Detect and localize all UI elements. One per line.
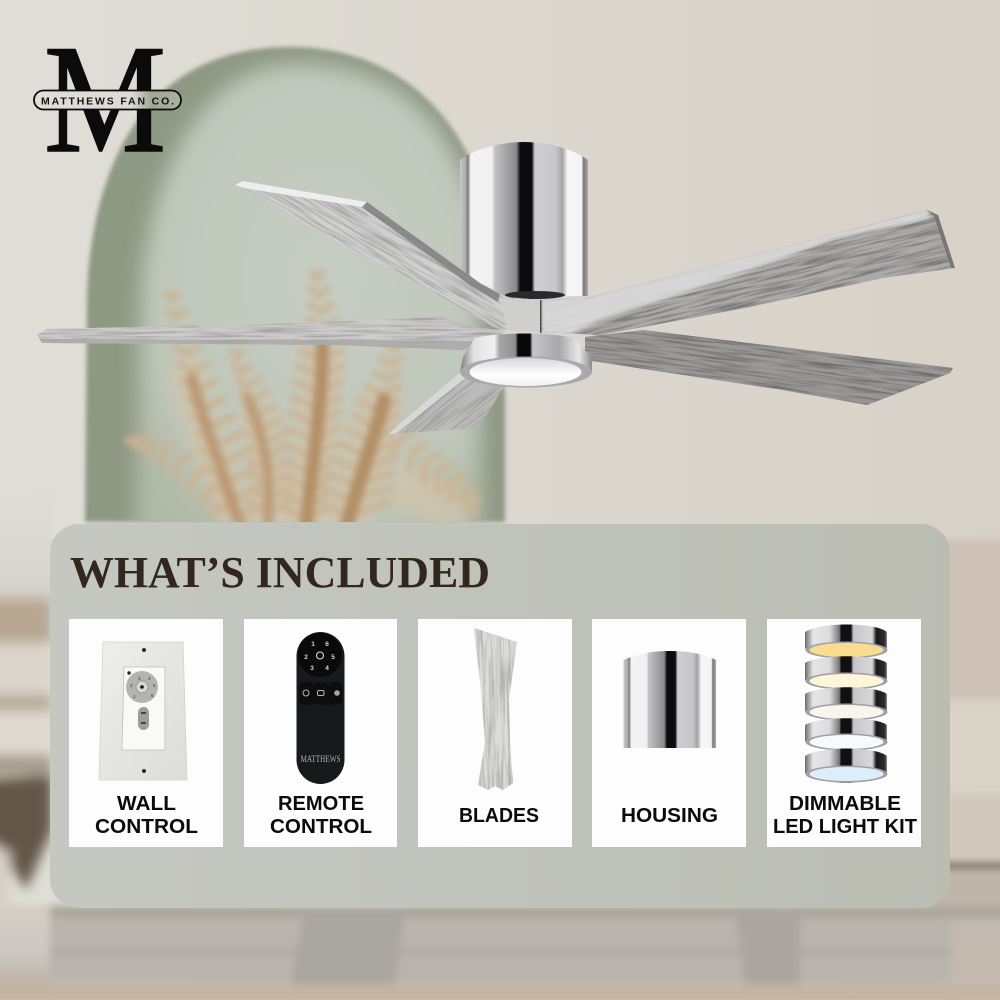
icon: wall control: 4 [148, 676, 151, 681]
icon: wall control: 3 [138, 676, 141, 681]
logo name pill [34, 90, 181, 110]
long left blade [37, 317, 506, 350]
icon: wall control: 2 [130, 683, 133, 688]
panel background [50, 524, 950, 908]
card: blades [418, 614, 572, 847]
card: remote control [244, 619, 397, 847]
icon: remote: 3 [310, 665, 314, 672]
blurred floor and table [0, 905, 1000, 1000]
icon: remote: 6 [325, 641, 329, 648]
motor housing [460, 142, 588, 299]
label: DIMMABLE [789, 792, 901, 815]
icon: remote: MATTHEWS [300, 754, 340, 764]
card: wall control: CONTROL [95, 815, 198, 838]
label: BLADES [459, 804, 539, 827]
icon: LED ring soft white [805, 687, 888, 720]
logo: Matthews Fan Co. [34, 13, 181, 185]
light kit ring [460, 334, 592, 388]
label: WALL [117, 792, 176, 815]
blurred sofa and cushion at left [0, 440, 52, 910]
card: wall control [69, 619, 223, 847]
ceiling fan [37, 142, 955, 434]
card: dimmable LED light kit [767, 619, 921, 847]
LED light [470, 358, 582, 386]
icon: wall control: 6 [151, 693, 154, 698]
icon: wall control: 1 [133, 694, 136, 699]
blade bracket seam [540, 300, 542, 333]
label: HOUSING [621, 804, 718, 827]
icon: LED ring warm cream [805, 656, 888, 690]
icon: remote: 2 [304, 654, 308, 661]
logo name text: MATTHEWS FAN CO. [41, 96, 174, 108]
pampas grass [128, 273, 478, 530]
icon: LED ring cool white [805, 718, 888, 750]
icon: LED ring daylight blue [805, 748, 888, 783]
upper right blade [542, 210, 955, 335]
icon: remote: 5 [331, 654, 335, 661]
icon: housing [624, 651, 716, 748]
icon: remote: 1 [311, 641, 315, 648]
label: REMOTE [278, 792, 364, 815]
arch shape [85, 47, 505, 522]
icon: LED ring warm amber [805, 624, 888, 658]
heading: WHAT’S INCLUDED [70, 548, 490, 597]
bottom left blade [388, 372, 504, 434]
icon: wall control [99, 642, 187, 780]
card: remote control: CONTROL [270, 815, 372, 838]
lower right blade [585, 330, 953, 405]
arched green niche with pampas [85, 47, 505, 540]
icon: remote: 4 [325, 665, 329, 672]
icon: blade [474, 628, 517, 790]
card: housing [592, 619, 746, 847]
upper left blade [236, 181, 540, 332]
card: dimmable LED light kit: LED LIGHT KIT [773, 815, 917, 838]
logo monogram M: M [44, 13, 166, 185]
blurred sofa at right [930, 540, 1000, 930]
icon: wall control: 5 [153, 683, 156, 688]
panel: what's included [50, 524, 950, 908]
icon: remote [296, 632, 344, 784]
